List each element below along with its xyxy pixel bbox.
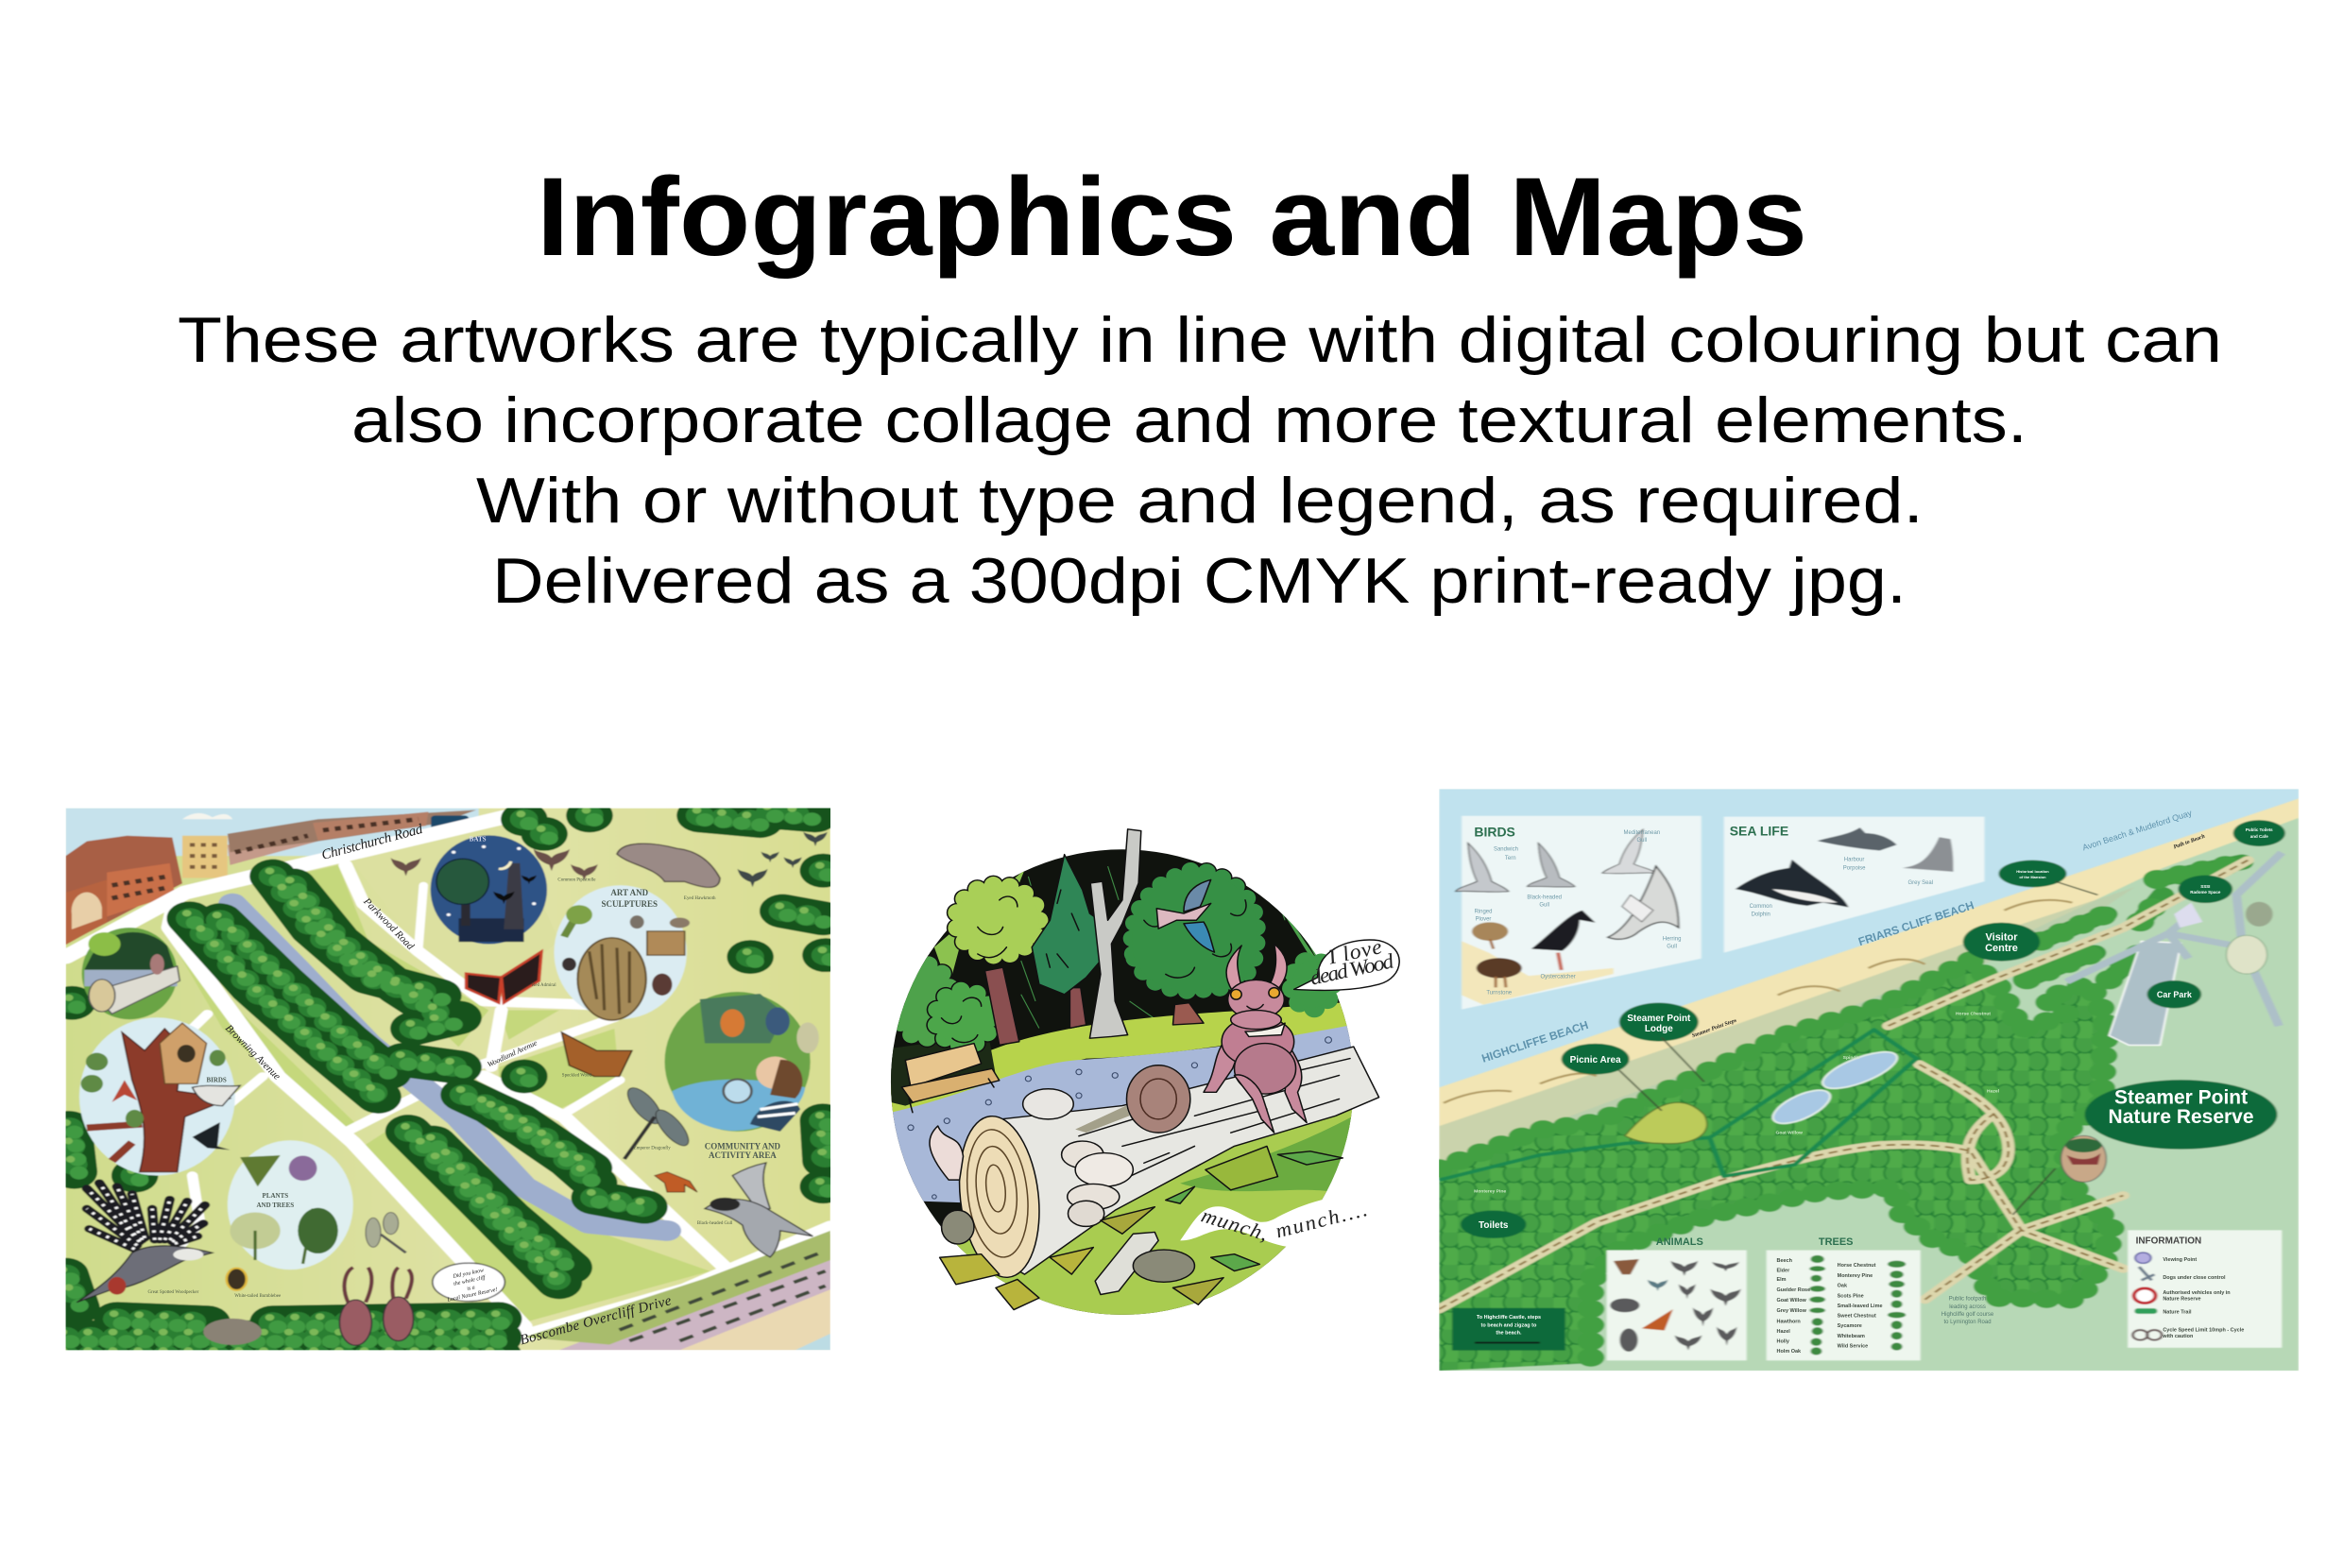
map text labels: Holm Oak xyxy=(1776,1349,1802,1355)
information board: birds xyxy=(1456,816,1702,1010)
map text labels: Visitor xyxy=(1986,932,2018,944)
map text labels: Grey Willow xyxy=(1776,1308,1807,1314)
map labels: Browning Avenue xyxy=(223,1023,282,1082)
circle: art and sculptures xyxy=(554,885,690,1020)
map labels: Eyed Hawkmoth xyxy=(684,896,716,901)
map text labels: Gull xyxy=(1636,838,1647,844)
panel: dead wood circular illustration xyxy=(887,829,1399,1319)
map text labels: Guelder Rose xyxy=(1776,1287,1810,1293)
title: Infographics and Maps xyxy=(537,155,1807,280)
map text labels: Holly xyxy=(1776,1338,1790,1344)
forest strips along the top xyxy=(2027,862,2242,980)
lower meadow xyxy=(956,1099,1360,1319)
dead standing tree xyxy=(1089,829,1141,1038)
map text labels: Cycle Speed Limit 10mph - Cycle xyxy=(2163,1327,2244,1333)
map labels: the whole cliff xyxy=(453,1274,487,1287)
legend: information xyxy=(2128,1230,2282,1348)
map text labels: Tern xyxy=(1505,856,1516,861)
map labels: Speckled Wood xyxy=(562,1074,592,1079)
picnic area xyxy=(1625,1102,1707,1144)
description text block xyxy=(178,304,2222,617)
map text labels: Authorised vehicles only in xyxy=(2163,1290,2231,1296)
panel: Steamer Point Nature Reserve map xyxy=(1439,789,2299,1371)
map text labels: Picnic Area xyxy=(1570,1055,1621,1065)
map text labels: Lodge xyxy=(1645,1024,1673,1034)
circle: dead wood scene xyxy=(82,928,180,1019)
map text labels: Steamer Point xyxy=(1627,1014,1691,1024)
light green verges xyxy=(164,821,710,1322)
description text block: These artworks are typically in line with digital colouring but can xyxy=(178,304,2222,376)
map labels: Common Pipistrelle xyxy=(557,878,596,883)
circle: plants and trees xyxy=(228,1140,353,1270)
speech bubble: I love dead wood xyxy=(1294,935,1399,990)
right hand bush xyxy=(1292,961,1332,1008)
map text labels: To Highcliffe Castle, steps xyxy=(1477,1315,1541,1321)
tree belts xyxy=(62,807,831,1360)
map text labels: with caution xyxy=(2162,1334,2194,1339)
map text labels: Sweet Chestnut xyxy=(1838,1314,1876,1320)
map labels: SCULPTURES xyxy=(602,899,658,909)
sign: to Highcliffe Castle xyxy=(1452,1308,1565,1351)
map text labels: Path to Beach xyxy=(2173,834,2206,850)
map text labels: SEA LIFE xyxy=(1730,824,1788,839)
stag beetle character xyxy=(1204,944,1307,1133)
sky and town xyxy=(66,809,479,945)
map text labels: ANIMALS xyxy=(1656,1236,1703,1248)
map text labels: Nature Trail xyxy=(2163,1309,2192,1315)
banner: munch, munch: munch, xyxy=(1199,1203,1272,1245)
description text block: Delivered as a 300dpi CMYK print-ready jpg. xyxy=(492,545,1907,617)
map text labels: Public footpath xyxy=(1949,1297,1986,1303)
map text labels: Car Park xyxy=(2157,990,2192,999)
map text labels: Harbour xyxy=(1844,857,1864,862)
circle: community and activity area xyxy=(664,992,819,1132)
map text labels: Highcliffe golf course xyxy=(1941,1312,1994,1318)
map text labels: and Cafe xyxy=(2250,834,2268,839)
map text labels: Oystercatcher xyxy=(1540,975,1576,980)
map text labels: Gull xyxy=(1667,945,1677,950)
map labels: Did you know xyxy=(452,1268,485,1280)
map labels xyxy=(147,822,781,1348)
footpaths xyxy=(1439,861,2248,1309)
icon: stag beetles xyxy=(339,1268,414,1345)
tree: lime green xyxy=(956,885,1039,1045)
map text labels xyxy=(1474,808,2273,1355)
green oval labels xyxy=(1461,820,2285,1238)
map text labels: Sycamore xyxy=(1838,1323,1862,1329)
map labels: Christchurch Road xyxy=(320,822,425,863)
icon: small dragonfly xyxy=(366,1212,406,1253)
icon: dragonfly xyxy=(621,1084,694,1159)
map labels: Black-headed Gull xyxy=(697,1221,733,1226)
legend: trees xyxy=(1767,1251,1921,1360)
map text labels: Hazel xyxy=(1987,1088,2000,1094)
map text labels: Gull xyxy=(1539,903,1549,909)
icon: fox xyxy=(655,1172,697,1192)
map text labels: Scots Pine xyxy=(1838,1293,1864,1299)
grass bank xyxy=(891,1001,1360,1116)
map text labels: Public Toilets xyxy=(2246,827,2273,832)
speech bubble: I love dead wood: I love xyxy=(1325,935,1384,969)
map text labels: Grey Seal xyxy=(1907,880,1933,886)
map text labels: TREES xyxy=(1819,1236,1853,1248)
map text labels: to beach and zigzag to xyxy=(1481,1322,1537,1328)
map labels: Parkwood Road xyxy=(361,895,417,952)
walking trail xyxy=(232,904,667,1231)
map text labels: Wild Service xyxy=(1838,1343,1868,1349)
map text labels: Dogs under close control xyxy=(2163,1275,2226,1281)
speech bubble xyxy=(433,1263,505,1302)
map labels: BIRDS xyxy=(206,1076,227,1083)
sea xyxy=(1439,789,2299,1087)
map text labels: Elder xyxy=(1776,1268,1790,1273)
map text labels: Nature Reserve xyxy=(2163,1297,2201,1303)
map labels: Red Admiral xyxy=(532,983,556,988)
map labels: BATS xyxy=(470,836,487,844)
tree: large green tree xyxy=(1132,870,1257,1025)
legend: animals xyxy=(1607,1251,1747,1360)
map text labels: INFORMATION xyxy=(2136,1236,2201,1247)
water xyxy=(891,1023,1364,1217)
map text labels: Avon Beach & Mudeford Quay xyxy=(2081,808,2194,852)
icon: speckled wood butterfly xyxy=(561,1032,632,1077)
map text labels: Hazel xyxy=(1776,1329,1790,1335)
seafront strip xyxy=(524,1231,830,1350)
map text labels: Monterey Pine xyxy=(1474,1188,1506,1194)
circle: birds with tree and birdbox xyxy=(79,1017,240,1176)
circle: bats xyxy=(431,835,547,944)
map text labels: Nature Reserve xyxy=(2109,1106,2254,1128)
map text labels: Beech xyxy=(1776,1258,1793,1264)
main forest mass xyxy=(1439,961,2112,1371)
map text labels: Mediterranean xyxy=(1624,830,1660,836)
map text labels: BIRDS xyxy=(1474,824,1515,839)
icon: woodpecker xyxy=(77,1183,213,1303)
speech bubble: I love dead wood: dead Wood xyxy=(1308,949,1396,989)
map text labels: Goat Willow xyxy=(1775,1130,1803,1135)
map text labels: Hawthorn xyxy=(1776,1319,1801,1324)
map text labels: Centre xyxy=(1985,943,2018,954)
left bush trees xyxy=(896,964,992,1046)
map text labels: Common xyxy=(1750,904,1772,910)
map labels: is a xyxy=(467,1285,475,1292)
fallen log xyxy=(951,1047,1379,1281)
icon: peacock moth xyxy=(617,844,720,887)
circular background xyxy=(887,846,1376,1319)
map labels: PLANTS xyxy=(263,1192,288,1200)
description text block: With or without type and legend, as required. xyxy=(476,465,1924,537)
beach xyxy=(1439,798,2299,1165)
map text labels: Horse Chestnut xyxy=(1838,1263,1876,1269)
map text labels: Steamer Point Steps xyxy=(1691,1017,1738,1039)
map labels: Local Nature Reserve! xyxy=(446,1287,498,1304)
map text labels: Oak xyxy=(1838,1284,1848,1289)
icon: jay bird xyxy=(1156,879,1214,952)
leaves xyxy=(940,1146,1343,1310)
map text labels: Goat Willow xyxy=(1776,1298,1807,1304)
map text labels: the beach. xyxy=(1496,1331,1522,1337)
map text labels: Dolphin xyxy=(1752,912,1770,917)
map text labels: SSSI xyxy=(2200,884,2210,889)
map labels: Great Spotted Woodpecker xyxy=(147,1290,199,1295)
map labels: Woodland Avenue xyxy=(486,1038,539,1069)
information board: sea life xyxy=(1724,817,1985,953)
map text labels: Turnstone xyxy=(1486,991,1513,997)
map text labels: Toilets xyxy=(1479,1220,1509,1231)
coral-like plant xyxy=(930,1126,964,1180)
map text labels: Plover xyxy=(1475,916,1491,922)
map text labels: to Lymington Road xyxy=(1944,1320,1992,1325)
icon: black-headed gull xyxy=(705,1163,812,1257)
map text labels: Sandwich xyxy=(1494,846,1518,852)
map labels: ART AND xyxy=(610,888,649,897)
map text labels: Monterey Pine xyxy=(1838,1273,1873,1279)
icon: bumblebee xyxy=(227,1269,247,1290)
pointer lines xyxy=(1619,881,2097,1215)
car park and roads xyxy=(2066,853,2282,1046)
map text labels: Historical location xyxy=(2016,869,2049,874)
map text labels: Horse Chestnut xyxy=(1956,1012,1991,1017)
map labels: White-tailed Bumblebee xyxy=(234,1294,282,1299)
nature trail xyxy=(1439,1030,1917,1180)
banner: munch, munch: munch.... xyxy=(1273,1198,1370,1242)
map text labels: Elm xyxy=(1776,1277,1787,1283)
map text labels: Radome Space xyxy=(2190,890,2221,895)
banner: munch, munch xyxy=(1180,1193,1372,1248)
description text block: also incorporate collage and more textural elements. xyxy=(351,384,2027,456)
map labels: AND TREES xyxy=(257,1202,294,1209)
medallion: geology xyxy=(2061,1135,2106,1182)
fungi xyxy=(1023,1065,1190,1226)
tree: conifer xyxy=(1032,855,1104,1028)
map labels: ACTIVITY AREA xyxy=(709,1150,777,1160)
map text labels: Black-headed xyxy=(1527,895,1562,900)
map labels: COMMUNITY AND xyxy=(705,1142,781,1151)
icon: swallows xyxy=(738,831,828,887)
map text labels: Ringed xyxy=(1474,910,1492,915)
map text labels: of the Mansion xyxy=(2019,875,2046,879)
white roads xyxy=(66,815,830,1338)
flying bats xyxy=(391,849,598,880)
map text labels: HIGHCLIFFE BEACH xyxy=(1480,1018,1590,1065)
map labels: Emperor Dragonfly xyxy=(634,1147,671,1151)
hedgehog xyxy=(203,1319,262,1345)
map text labels: leading across xyxy=(1949,1304,1986,1310)
panel: illustrated park map xyxy=(62,807,831,1360)
map text labels: Porpoise xyxy=(1843,865,1866,871)
snapped branch and woodlouse xyxy=(942,1210,1194,1295)
map text labels: Herring xyxy=(1663,937,1681,943)
map text labels: Spindle xyxy=(1843,1055,1860,1061)
map labels: Boscombe Overcliff Drive xyxy=(519,1293,674,1348)
map text labels: FRIARS CLIFF BEACH xyxy=(1856,898,1975,948)
icon: red admiral butterfly xyxy=(466,951,541,1003)
bench xyxy=(901,1044,1000,1113)
map text labels: Small-leaved Lime xyxy=(1838,1304,1882,1309)
map text labels: Viewing Point xyxy=(2163,1257,2197,1263)
ponds xyxy=(1765,1045,1905,1130)
map text labels: Steamer Point xyxy=(2114,1087,2248,1109)
map text labels: Whitebeam xyxy=(1838,1334,1865,1339)
